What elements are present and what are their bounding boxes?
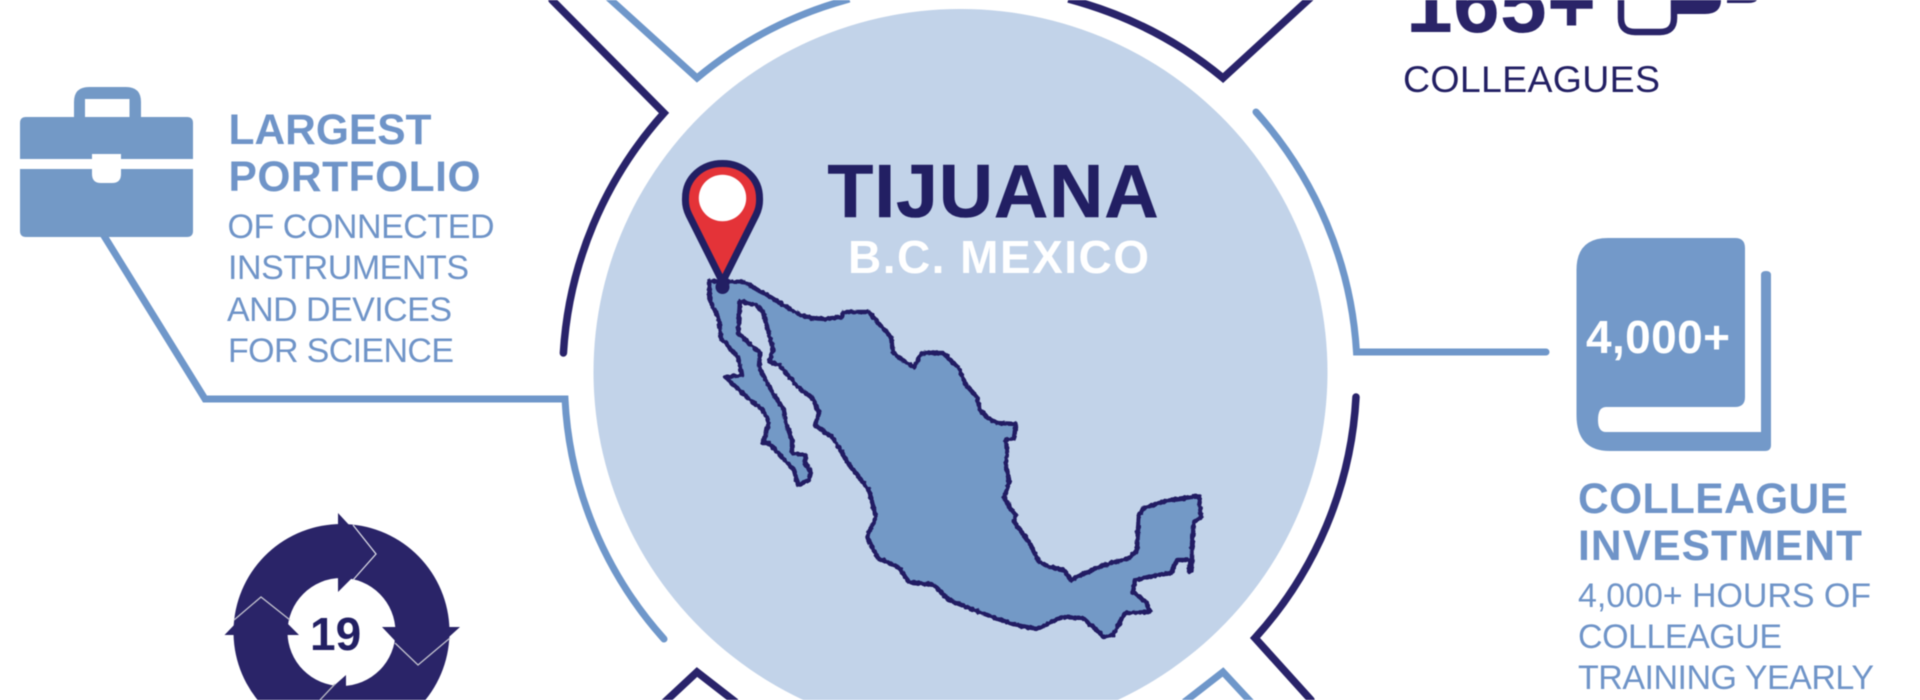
ring segment and connector: right light to book <box>1256 112 1546 352</box>
text: colleague investment: COLLEAGUE <box>1578 476 1848 523</box>
icon: cycle arrows with 19 <box>224 513 460 700</box>
stat: 165+ colleagues <box>1403 0 1757 100</box>
text: largest portfolio: INSTRUMENTS <box>228 249 469 287</box>
ring segment and connector: top light <box>611 0 846 78</box>
stat: 165+ colleagues: COLLEAGUES <box>1403 58 1660 100</box>
text: colleague investment: 4,000+ HOURS OF <box>1578 577 1871 615</box>
ring segment: bottom light peak <box>1187 672 1249 700</box>
number 19: 19 <box>310 608 361 660</box>
text: largest portfolio: PORTFOLIO <box>228 154 480 201</box>
central circle <box>593 9 1327 700</box>
map of Mexico <box>709 281 1201 637</box>
text: colleague investment: COLLEAGUE <box>1578 618 1782 656</box>
icon: briefcase <box>20 87 193 237</box>
ring segment: bottom dark peak <box>667 672 733 700</box>
text: largest portfolio: OF CONNECTED <box>228 208 494 246</box>
text: colleague investment: INVESTMENT <box>1578 523 1862 570</box>
text: largest portfolio: AND DEVICES <box>227 291 452 329</box>
ring segment and connector: top dark <box>1072 0 1308 78</box>
icon: book with 4,000+ <box>1576 238 1771 451</box>
ring segment and connector: lower right dark <box>1255 397 1356 700</box>
text: largest portfolio: FOR SCIENCE <box>228 332 454 370</box>
ring segment and connector: top-left dark <box>552 0 664 353</box>
text: largest portfolio: LARGEST <box>228 107 432 154</box>
icon: location pin <box>685 164 760 294</box>
text: colleague investment: TRAINING YEARLY <box>1578 659 1874 697</box>
icon: colleagues <box>1621 0 1757 32</box>
subtitle: B.C. Mexico: B.C. MEXICO <box>848 231 1149 283</box>
text: largest portfolio <box>227 107 494 370</box>
book label: 4,000+ <box>1586 311 1730 363</box>
title: Tijuana: TIJUANA <box>828 149 1158 233</box>
ring segment and connector: left light from briefcase <box>104 235 664 639</box>
text: colleague investment <box>1578 476 1874 697</box>
